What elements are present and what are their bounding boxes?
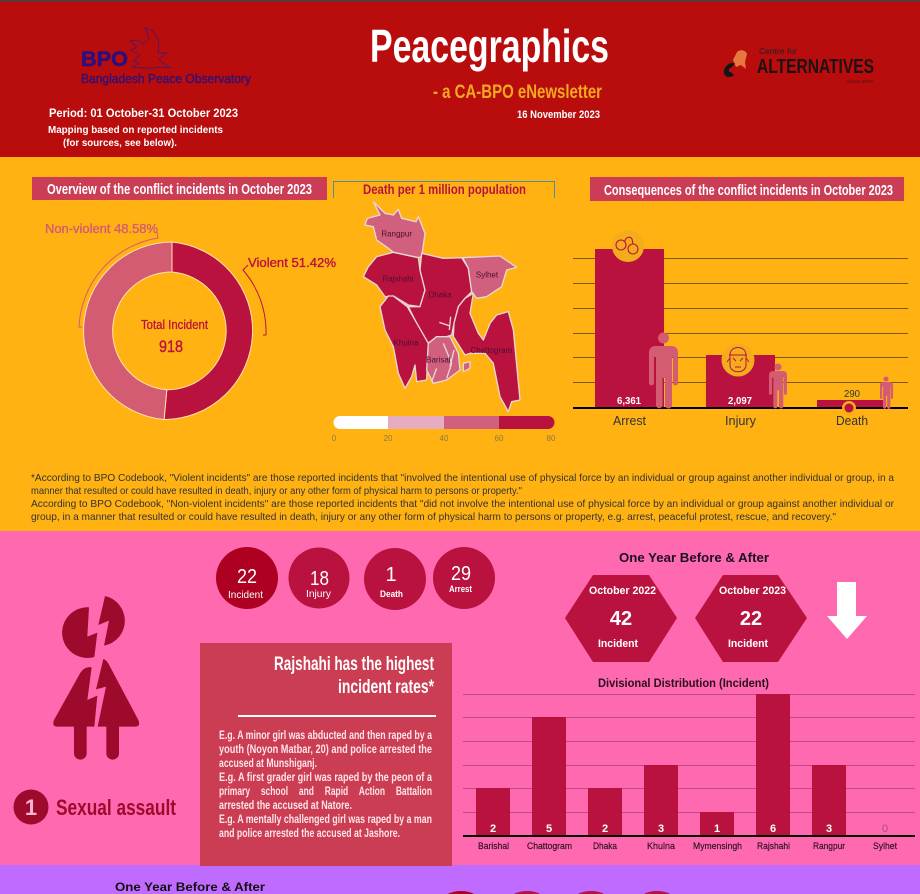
- bar chart: divisional distribution: 2: [490, 823, 496, 835]
- stat: death: [364, 548, 426, 610]
- choropleth map: Sylhet: [476, 271, 499, 280]
- callout: Rajshahi: E.g. A first grader girl was raped by the peon of a: [219, 770, 432, 784]
- hexagon: October 2023: [695, 575, 807, 662]
- stat: incident: [216, 547, 278, 609]
- callout: Rajshahi: incident rates*: [338, 677, 434, 698]
- bar chart: divisional distribution: 0: [882, 823, 888, 835]
- bar chart: divisional distribution: 1: [714, 823, 720, 835]
- period text: Mapping based on reported incidents: [48, 124, 223, 136]
- bar chart: divisional distribution: 5: [546, 823, 552, 835]
- heading: sexual assault: 1: [25, 795, 37, 820]
- icon: death: [842, 401, 856, 415]
- callout: Rajshahi: accused at Munshiganj.: [219, 756, 317, 770]
- donut chart: 918: [159, 337, 183, 356]
- panel: next section: [0, 865, 920, 894]
- heading: consequences: [590, 177, 904, 201]
- heading: sexual assault: Sexual assault: [56, 795, 177, 820]
- period text: [48, 108, 238, 149]
- title: Peacegraphics: [370, 20, 609, 72]
- stat: arrest: [433, 547, 495, 609]
- callout: Rajshahi: Rajshahi has the highest: [274, 654, 434, 675]
- choropleth map: Rangpur: [381, 230, 412, 239]
- donut chart: Total Incident: [141, 317, 208, 332]
- map legend: [332, 416, 556, 443]
- stat: injury: Injury: [306, 589, 331, 600]
- subtitle: - a CA-BPO eNewsletter: [433, 82, 602, 103]
- stat: injury: [288, 548, 350, 608]
- bar values and labels: [613, 388, 868, 428]
- logo: Centre for Alternatives: [724, 47, 874, 84]
- bar chart: divisional distribution: 6: [770, 823, 776, 835]
- bar values and labels: Arrest: [613, 413, 646, 428]
- hexagon: October 2023: 22: [740, 608, 762, 630]
- callout: Rajshahi: [200, 643, 452, 866]
- footnote: group, in a manner that resulted or could have resulted in death, injury or any other form of physical harm to persons or property, e.g. arrest, peaceful protest, rescue, and recovery.": [31, 512, 836, 523]
- hexagon: October 2022: October 2022: [589, 585, 656, 597]
- map legend: 40: [440, 434, 449, 443]
- logo: Centre for Alternatives: Since 2007: [847, 79, 874, 84]
- callout: Rajshahi: and police arrested the accused at Jashore.: [219, 826, 400, 840]
- footnote: *According to BPO Codebook, "Violent incidents" are those reported incidents that "involved the intentional use of physical force by an individual or group against another individual or group, in a: [31, 473, 894, 484]
- stat: incident: Incident: [228, 590, 263, 601]
- donut chart: [45, 222, 336, 420]
- logo: Bangladesh Peace Observatory: BPO: [81, 48, 128, 71]
- date: 16 November 2023: [517, 109, 600, 121]
- stat: death: 1: [385, 564, 397, 586]
- hexagon: October 2022: [565, 575, 677, 662]
- choropleth map: Chattogram: [470, 346, 513, 355]
- donut chart: Violent 51.42%: [248, 256, 336, 270]
- heading: sexual assault: [14, 790, 177, 824]
- panel: sexual assault: [0, 531, 920, 866]
- map legend: 0: [332, 434, 337, 443]
- period text: Period: 01 October-31 October 2023: [49, 108, 238, 120]
- stat: death: Death: [380, 589, 403, 599]
- figure: death person: [880, 376, 893, 409]
- choropleth map: Dhaka: [428, 291, 452, 300]
- callout: Rajshahi: primary school and Rapid Action Battalion: [219, 784, 432, 798]
- figure: injury person: [769, 364, 787, 408]
- stat: arrest: 29: [451, 563, 471, 585]
- heading: overview: [32, 177, 327, 200]
- bar chart: divisional distribution: Mymensingh: [693, 841, 742, 851]
- choropleth map: [363, 202, 520, 412]
- map legend: 60: [495, 434, 504, 443]
- donut chart: Non-violent 48.58%: [45, 222, 158, 236]
- figure: arrest person: [649, 332, 678, 408]
- bar values and labels: Injury: [725, 413, 756, 428]
- footnote: According to BPO Codebook, "Non-violent incidents" are those reported incidents that "did not involve the intentional use of physical force by an individual or group against another individual or: [31, 499, 895, 510]
- bar chart: divisional distribution: 2: [602, 823, 608, 835]
- heading: death map: Death per 1 million population: [363, 181, 526, 197]
- logo: Centre for Alternatives: Centre for: [759, 47, 797, 56]
- callout: Rajshahi: E.g. A minor girl was abducted and then raped by a: [219, 728, 432, 742]
- hexagon: October 2023: Incident: [728, 638, 768, 650]
- choropleth map: Rajshahi: [382, 275, 414, 284]
- bar chart: consequences: [573, 230, 908, 428]
- logo: Bangladesh Peace Observatory: Bangladesh Peace Observatory: [81, 72, 252, 86]
- bar chart: divisional distribution: 3: [826, 823, 832, 835]
- callout: Rajshahi: youth (Noyon Matbar, 20) and police arrested the: [219, 742, 432, 756]
- bar chart: divisional distribution: Rajshahi: [757, 841, 790, 851]
- icon: injured face: [722, 344, 754, 376]
- heading: one year before and after: One Year Before & After: [619, 550, 769, 565]
- stat circle tops: [448, 891, 670, 894]
- icon: handcuffs: [612, 230, 644, 262]
- map legend: 20: [384, 434, 393, 443]
- stat: arrest: Arrest: [449, 584, 472, 594]
- bar values and labels: 290: [844, 388, 860, 400]
- footnote: manner that resulted or could have resulted in death, injury or any other form of physical harm to persons or property.": [31, 486, 522, 497]
- stat: injury: 18: [310, 568, 329, 590]
- bar values and labels: Death: [836, 413, 868, 428]
- bar chart: divisional distribution: Barishal: [478, 841, 509, 851]
- bar chart: divisional distribution: [463, 678, 915, 851]
- map legend: 80: [547, 434, 556, 443]
- panel: October overview: [0, 157, 920, 531]
- callout: Rajshahi: E.g. A mentally challenged girl was raped by a man: [219, 812, 432, 826]
- bar chart: divisional distribution: Rangpur: [813, 841, 845, 851]
- arrow: decrease: [827, 582, 867, 639]
- stat: incident: 22: [237, 566, 257, 588]
- bar chart: divisional distribution: Chattogram: [527, 841, 572, 851]
- bar chart: divisional distribution: 3: [658, 823, 664, 835]
- bar chart: divisional distribution: Dhaka: [593, 841, 617, 851]
- footnote: [31, 473, 895, 523]
- bar values and labels: 6,361: [617, 395, 641, 407]
- bar chart: divisional distribution: Khulna: [647, 841, 675, 851]
- bar chart: divisional distribution: Sylhet: [873, 841, 897, 851]
- hexagon: October 2022: 42: [610, 608, 632, 630]
- period text: (for sources, see below).: [63, 137, 177, 149]
- bar chart: divisional distribution: Divisional Distribution (Incident): [598, 678, 769, 690]
- callout: Rajshahi: arrested the accused at Natore.: [219, 798, 352, 812]
- hexagon: October 2022: Incident: [598, 638, 638, 650]
- logo: Centre for Alternatives: ALTERNATIVES: [757, 56, 874, 78]
- bar values and labels: 2,097: [728, 395, 752, 407]
- icon: broken woman figure: [53, 596, 139, 760]
- choropleth map: Barisal: [426, 356, 451, 365]
- heading: one year before and after: One Year Before & After: [115, 880, 265, 894]
- hexagon: October 2023: October 2023: [719, 585, 786, 597]
- choropleth map: Khulna: [394, 339, 419, 348]
- panel: header: [0, 0, 920, 157]
- heading: overview: Overview of the conflict incidents in October 2023: [47, 181, 312, 198]
- logo: Bangladesh Peace Observatory: [81, 28, 252, 86]
